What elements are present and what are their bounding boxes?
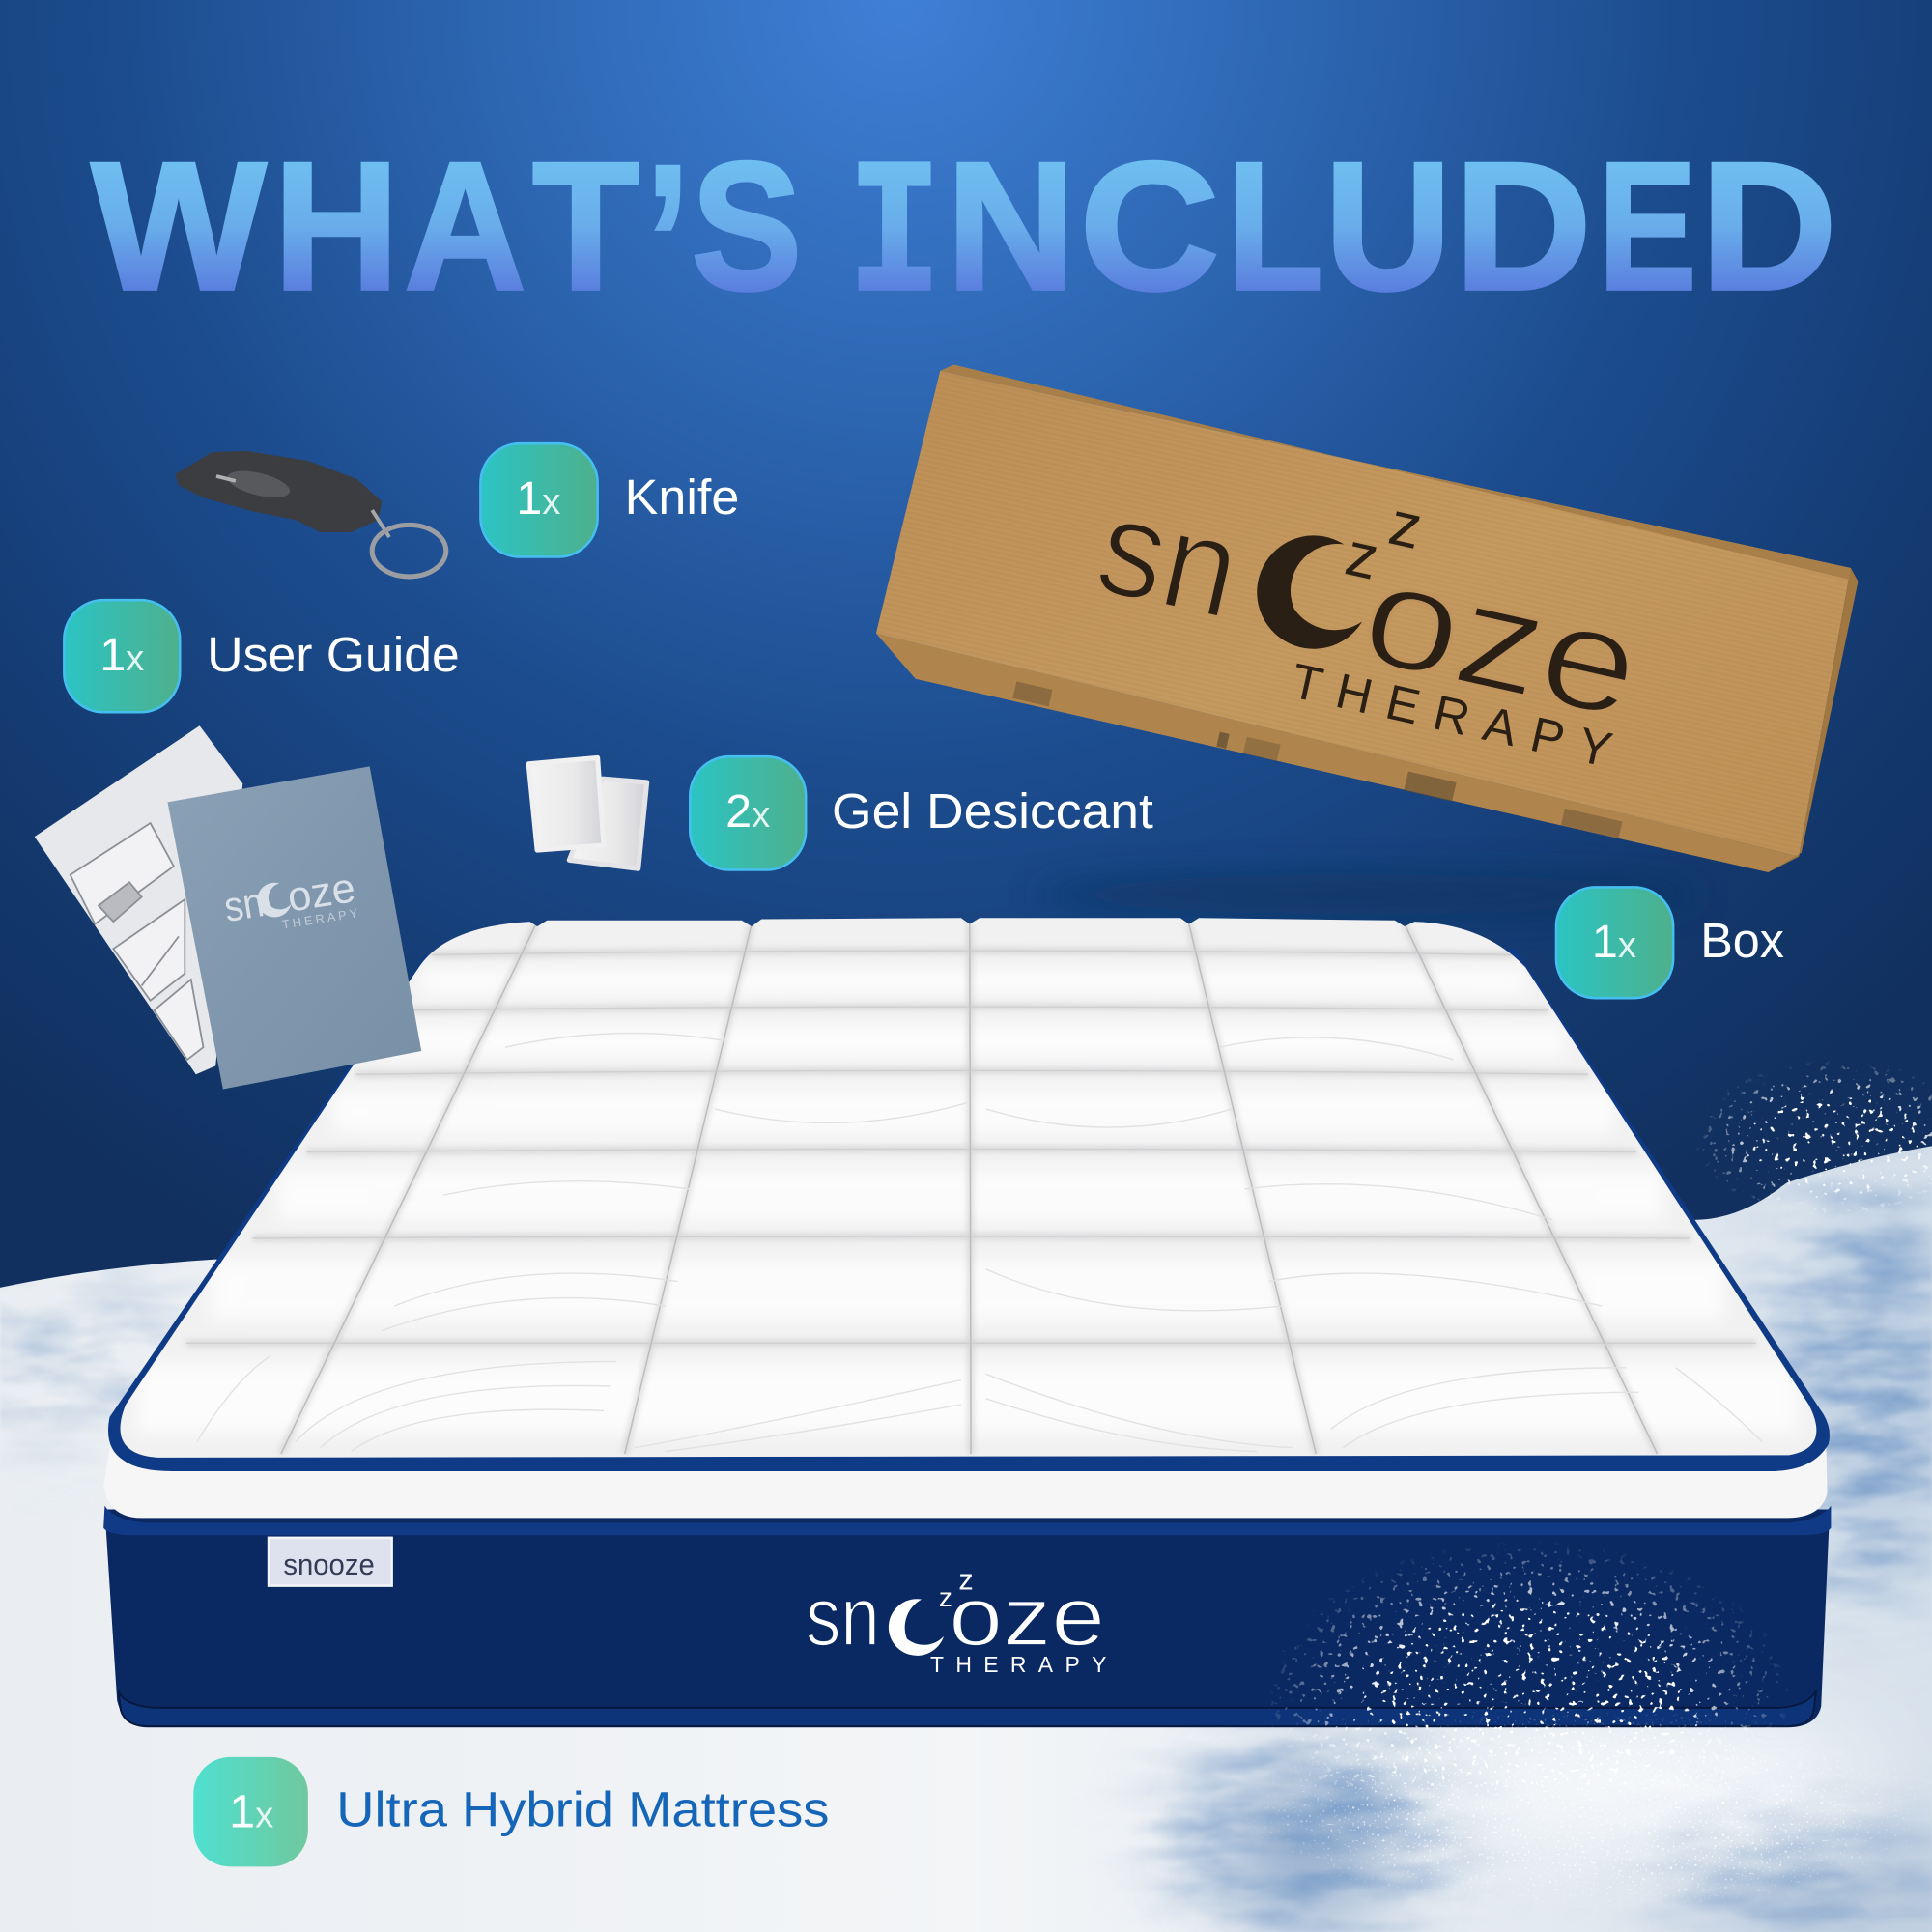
box front face <box>876 371 1851 856</box>
quilting seams <box>135 924 1799 1454</box>
title: N <box>947 125 1076 328</box>
title: D <box>1700 125 1837 328</box>
title: S <box>692 125 802 328</box>
mattress side panel <box>104 1509 1830 1727</box>
title: A <box>404 125 526 328</box>
booklet logo: oze <box>284 865 358 922</box>
mattress lower piping <box>118 1690 1816 1726</box>
title: W <box>91 125 267 328</box>
badge: user guide: 1x <box>99 629 144 681</box>
badge: box: 1x <box>1592 916 1636 968</box>
badge: gel desiccant: 2x <box>725 785 770 838</box>
mattress tag <box>269 1538 392 1586</box>
box top edge <box>940 365 1858 582</box>
badge: user guide <box>64 600 180 712</box>
box logo: sn <box>1085 469 1253 648</box>
icon: knife <box>175 451 446 577</box>
mattress quilted top <box>120 918 1816 1458</box>
booklet logo <box>221 865 360 940</box>
label: user guide: User Guide <box>207 627 460 682</box>
badge: knife <box>480 443 598 557</box>
badge: knife: 1x <box>516 472 560 525</box>
badge: box <box>1556 887 1673 998</box>
box logo: oze <box>1350 530 1655 749</box>
snow spray over mattress <box>1269 1540 1799 1786</box>
box print marks <box>1012 681 1623 838</box>
mattress logo <box>806 1563 1106 1677</box>
white pillow band <box>103 1441 1828 1518</box>
box right edge <box>1768 568 1858 872</box>
label: box: Box <box>1700 913 1784 968</box>
box logo: z <box>1383 488 1429 562</box>
box corrugation <box>876 371 1851 856</box>
booklet logo: sn <box>221 879 268 931</box>
side piping <box>103 1506 1831 1535</box>
booklet <box>167 766 421 1090</box>
mattress logo: z <box>958 1563 974 1596</box>
mattress tag: snooze <box>283 1548 375 1581</box>
box logo <box>1076 427 1664 780</box>
mattress <box>103 918 1831 1727</box>
sheet diagrams <box>71 823 203 1060</box>
mattress logo: oze <box>949 1570 1105 1663</box>
booklet logo: THERAPY <box>281 905 359 932</box>
box logo: z <box>1340 519 1385 593</box>
shadow under box <box>1035 875 1700 914</box>
icon: gel desiccant <box>528 757 647 868</box>
snow spray top right <box>1697 1061 1932 1213</box>
snow ground <box>0 1133 1932 1932</box>
title: T <box>532 125 639 328</box>
title: D <box>1454 125 1592 328</box>
label: gel desiccant: Gel Desiccant <box>832 783 1153 838</box>
label: mattress: Ultra Hybrid Mattress <box>336 1781 829 1836</box>
title: ’ <box>645 118 690 366</box>
title: C <box>1079 125 1220 328</box>
badge: mattress: 1x <box>229 1786 273 1838</box>
mattress logo: z <box>939 1582 952 1612</box>
mattress logo: THERAPY <box>930 1652 1106 1677</box>
label: knife: Knife <box>625 469 739 525</box>
snow sparkle foreground <box>1252 1713 1915 1902</box>
title: E <box>1598 125 1696 328</box>
mattress top navy edge <box>108 949 1830 1471</box>
title: L <box>1227 125 1323 328</box>
instruction sheet <box>35 725 242 1074</box>
badge: mattress <box>193 1757 308 1866</box>
mattress logo: sn <box>806 1570 880 1663</box>
title: U <box>1324 125 1452 328</box>
icon: user guide <box>35 725 421 1090</box>
badge: gel desiccant <box>690 756 806 870</box>
box bottom strip <box>876 634 1799 872</box>
title: H <box>273 125 399 328</box>
title: I <box>848 130 941 347</box>
box logo: THERAPY <box>1287 653 1617 778</box>
box <box>876 365 1858 872</box>
